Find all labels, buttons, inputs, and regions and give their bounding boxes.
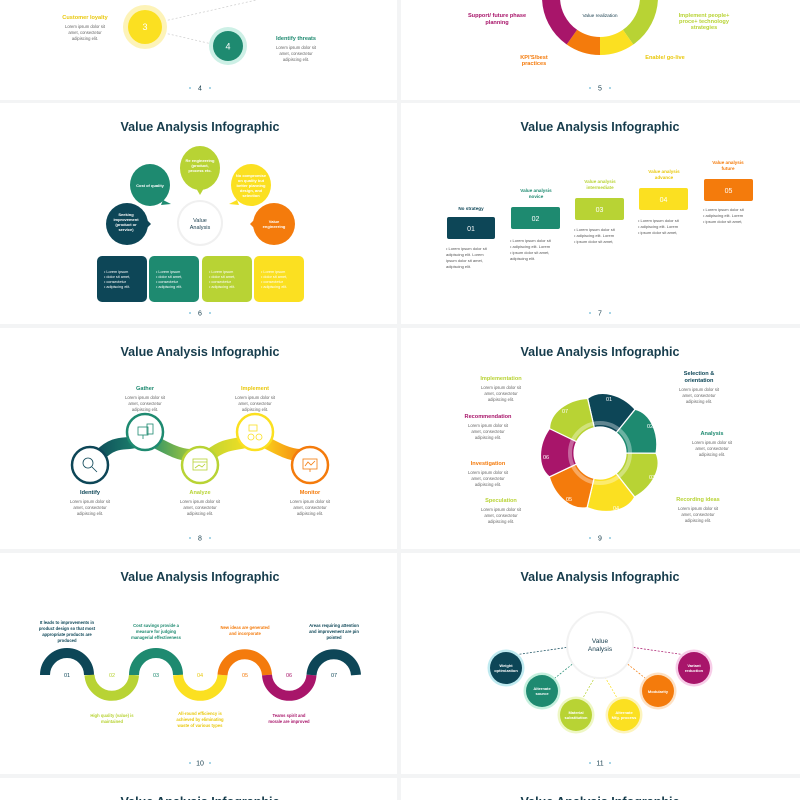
connectors (100, 442, 300, 455)
satellite circles: reduction (685, 668, 704, 673)
text: identify threats (276, 36, 317, 62)
slide 5 partial: donut: proce+ technology (679, 19, 730, 25)
bubbles (106, 146, 295, 245)
panel: slide 9 (465, 344, 733, 542)
step bullets: adipiscing elit. (446, 264, 471, 269)
page number 6: 6 (198, 310, 202, 318)
icon: circle 4 (209, 27, 247, 65)
steps: 03 (596, 207, 603, 214)
panel: slide 9: Lorem ipsum dolor sit (692, 440, 733, 445)
panel: slide 11 (488, 569, 712, 768)
panel: slide 9: amet, consectetur (471, 429, 505, 434)
step bullets: • Lorem ipsum dolor sit (574, 227, 616, 232)
step labels: future (721, 166, 735, 171)
title: Value Analysis Infographic (120, 119, 280, 134)
petal numbers: 01 (606, 397, 612, 403)
bubbles: Seeking (118, 212, 134, 217)
panel: slide 9: Analysis (700, 431, 724, 437)
icon: circle 3: 3 (142, 22, 148, 32)
text: identify threats: amet, consectetur (279, 51, 313, 56)
slide 4 partial (62, 0, 317, 92)
step bullets: • ipsum dolor sit amet, (510, 250, 549, 255)
labels right: Selection & (684, 371, 714, 377)
labels (468, 13, 526, 26)
panel: slide 8: amet, consectetur (73, 505, 107, 510)
boxes: • consectetur (261, 280, 284, 284)
boxes: • adipiscing elit. (209, 285, 235, 289)
step labels: adipiscing elit. (132, 407, 158, 412)
bubbles: service) (118, 227, 134, 232)
panel: slide 9: amet, consectetur (681, 512, 715, 517)
panel: slide 8: amet, consectetur (238, 401, 272, 406)
center circle: Analysis (190, 225, 210, 231)
panel: slide 9: Investigation (471, 461, 506, 467)
text: identify threats: Identify threats (276, 36, 316, 42)
bubbles: engineering (263, 224, 286, 229)
panel: slide 8: adipiscing elit. (242, 407, 268, 412)
page number 5 (589, 86, 611, 92)
step bullets: ipsum dolor sit amet, (446, 258, 483, 263)
bubbles: selection (242, 193, 260, 198)
bubbles: Value (269, 219, 280, 224)
captions: Teams spirit and (273, 713, 306, 718)
satellite circles: Material (568, 710, 584, 715)
steps: 02 (532, 216, 539, 223)
satellite circles: Alternate (615, 710, 633, 715)
satellite circles: Variant (687, 663, 701, 668)
boxes: • adipiscing elit. (261, 285, 287, 289)
panel: slide 10: 06 (286, 673, 292, 679)
labels right (679, 371, 720, 404)
panel: slide 9: adipiscing elit. (685, 518, 711, 523)
petal numbers: 04 (613, 506, 619, 512)
text: customer loyalty: adipiscing elit. (72, 36, 98, 41)
step bullets: • Lorem ipsum dolor sit (703, 207, 745, 212)
step labels: intermediate (586, 185, 614, 190)
labels: Support/ future phase (468, 13, 526, 19)
satellite circles: Modularity (648, 689, 669, 694)
panel: slide 8: Identify (80, 490, 101, 496)
captions: It leads to improvements in (40, 620, 95, 625)
panel: slide 8: Value Analysis Infographic (120, 344, 280, 359)
captions: maintained (101, 719, 123, 724)
slide 5 partial: donut: Enable/ go-live (645, 55, 685, 61)
step labels: Gather (136, 386, 155, 392)
petal numbers: 05 (566, 497, 572, 503)
panel: slide 8: amet, consectetur (183, 505, 217, 510)
panel: slide 10: 01 (64, 673, 70, 679)
labels left: adipiscing elit. (488, 397, 514, 402)
labels right: orientation (685, 378, 714, 384)
captions: produced (57, 638, 77, 643)
panel: slide 6 (97, 119, 304, 318)
captions: product design so that most (39, 626, 96, 631)
panel: slide 10: 03 (153, 673, 159, 679)
wave (45, 653, 356, 696)
labels: planning (485, 20, 509, 26)
panel: slide 7: 7 (598, 310, 602, 318)
captions: morale are improved (268, 719, 310, 724)
step labels: No strategy (458, 206, 484, 211)
panel: slide 10: 05 (242, 673, 248, 679)
captions: waste of various types (177, 723, 223, 728)
text: customer loyalty: amet, consectetur (68, 30, 102, 35)
panel: slide 8: adipiscing elit. (187, 511, 213, 516)
icon: circle 3 (123, 5, 167, 49)
boxes: • adipiscing elit. (156, 285, 182, 289)
satellite circles: optimization (494, 668, 518, 673)
step labels: Value analysis (648, 169, 680, 174)
text: customer loyalty (62, 15, 109, 41)
panel: slide 9: Recording ideas (676, 497, 720, 503)
text: customer loyalty: Lorem ipsum dolor sit (65, 24, 106, 29)
step bullets: • adipiscing elit. Lorem (703, 213, 744, 218)
boxes: • consectetur (209, 280, 232, 284)
step bullets: • adipiscing elit. Lorem (510, 244, 551, 249)
boxes: • Lorem ipsum (261, 270, 285, 274)
petal numbers: 02 (647, 424, 653, 430)
bubbles: Cost of quality (136, 183, 165, 188)
step labels: Value analysis (712, 160, 744, 165)
panel: slide 10: Value Analysis Infographic (120, 569, 280, 584)
satellite circles: Alternate (533, 686, 551, 691)
panel: slide 11: 11 (596, 760, 604, 768)
step bullets: • adipiscing elit. Lorem (638, 224, 679, 229)
satellite circles: source (535, 691, 549, 696)
petal numbers (543, 397, 655, 512)
boxes: • consectetur (156, 280, 179, 284)
captions: appropriate products are (42, 632, 92, 637)
satellite circles: substitution (565, 715, 588, 720)
boxes: • dolor sit amet, (156, 275, 182, 279)
panel: slide 9: amet, consectetur (484, 513, 518, 518)
panel: slide 10: 04 (197, 673, 203, 679)
panel: slide 8: Lorem ipsum dolor sit (180, 499, 221, 504)
text: identify threats: adipiscing elit. (283, 57, 309, 62)
step labels: advance (655, 175, 674, 180)
boxes: • Lorem ipsum (156, 270, 180, 274)
boxes: • dolor sit amet, (261, 275, 287, 279)
step bullets: • ipsum dolor sit amet, (574, 239, 613, 244)
panel: slide 8 (70, 344, 331, 542)
step bullets: adipiscing elit. Lorem (446, 252, 484, 257)
captions: High quality (value) is (90, 713, 134, 718)
step labels: amet, consectetur (128, 401, 162, 406)
flower chart (540, 390, 664, 516)
page number 6 (189, 310, 211, 318)
bubbles: better planning (237, 183, 266, 188)
panel: slide 9: adipiscing elit. (488, 519, 514, 524)
slide 5 partial: donut: KPI'S/best (520, 55, 548, 61)
panel: slide 9: 9 (598, 536, 602, 542)
step bullets (446, 207, 745, 269)
panel: slide 10 (39, 569, 359, 768)
labels right: amet, consectetur (682, 393, 716, 398)
panel: slide 9: Lorem ipsum dolor sit (678, 506, 719, 511)
labels left: Lorem ipsum dolor sit (481, 385, 522, 390)
step bullets: • Lorem ipsum dolor sit (510, 238, 552, 243)
steps: 05 (725, 188, 732, 195)
panel: slide 8: adipiscing elit. (77, 511, 103, 516)
page number 4 (189, 86, 211, 92)
panel: slide 9: Lorem ipsum dolor sit (468, 423, 509, 428)
step bullets: • Lorem ipsum dolor sit (446, 246, 488, 251)
satellite circles: Weight (499, 663, 513, 668)
captions: measure for judging (136, 629, 177, 634)
panel: slide 9: adipiscing elit. (475, 435, 501, 440)
center circle (566, 611, 634, 679)
panel: slide 9: Lorem ipsum dolor sit (468, 470, 509, 475)
petal numbers: 07 (562, 409, 568, 415)
number discs (57, 665, 344, 685)
icons (83, 424, 317, 472)
step bullets: • adipiscing elit. Lorem (574, 233, 615, 238)
captions: pointed (326, 635, 342, 640)
step labels: novice (529, 194, 544, 199)
bubbles: improvement (113, 217, 139, 222)
panel: slide 11: Value Analysis Infographic (520, 569, 680, 584)
step bullets: • Lorem ipsum dolor sit (638, 218, 680, 223)
boxes: • consectetur (104, 280, 127, 284)
petal numbers: 06 (543, 455, 549, 461)
center circle: Analysis (588, 646, 613, 653)
captions: Areas requiring attention (309, 623, 359, 628)
slide 5 partial: donut: Implement people+ (679, 13, 730, 19)
boxes: • dolor sit amet, (209, 275, 235, 279)
satellite circles: Mfg. process (612, 715, 637, 720)
step labels (458, 160, 744, 211)
panel: slide 10: 02 (109, 673, 115, 679)
captions (39, 620, 359, 728)
step labels: Lorem ipsum dolor sit (125, 395, 166, 400)
icon: circle 4: 4 (225, 42, 231, 52)
panel: slide 8: Lorem ipsum dolor sit (235, 395, 276, 400)
panel: slide 8: 8 (198, 536, 202, 542)
captions: All-round efficiency is (178, 711, 223, 716)
bubbles: on quality but (238, 178, 265, 183)
slide 5 partial: donut (468, 0, 730, 92)
satellite circles (488, 650, 712, 734)
center circle: Value (193, 218, 207, 224)
captions: and improvement are pin (309, 629, 359, 634)
step labels: Value analysis (584, 179, 616, 184)
panel: slide 8: Lorem ipsum dolor sit (70, 499, 111, 504)
panel: slide 7: Value Analysis Infographic (520, 119, 680, 134)
partial titles bottom (120, 794, 680, 800)
step bullets: • ipsum dolor sit amet, (638, 230, 677, 235)
center circle (177, 200, 223, 246)
panel: slide 8: Lorem ipsum dolor sit (290, 499, 331, 504)
panel: slide 9: Speculation (485, 498, 517, 504)
boxes: • Lorem ipsum (104, 270, 128, 274)
text: identify threats: Lorem ipsum dolor sit (276, 45, 317, 50)
panel: slide 9: amet, consectetur (695, 446, 729, 451)
panel: slide 10: 07 (331, 673, 337, 679)
panel: slide 8: adipiscing elit. (297, 511, 323, 516)
panel: slide 8: Analyze (189, 490, 211, 496)
boxes: • dolor sit amet, (104, 275, 130, 279)
step circles (72, 414, 328, 483)
panel: slide 8: Implement (241, 386, 269, 392)
steps (447, 179, 753, 239)
panel: slide 10: 10 (196, 760, 204, 768)
panel: slide 9: adipiscing elit. (699, 452, 725, 457)
bubbles: (product, (191, 163, 209, 168)
panel: slide 9: adipiscing elit. (475, 482, 501, 487)
labels left (480, 376, 522, 402)
steps: 01 (467, 226, 475, 233)
center circle: Value (592, 638, 608, 645)
step labels: Value analysis (520, 188, 552, 193)
text: customer loyalty: Customer loyalty (62, 15, 109, 21)
step bullets: • ipsum dolor sit amet, (703, 219, 742, 224)
bubbles: (product or (115, 222, 137, 227)
captions: and incorporate (229, 631, 261, 636)
bubbles: No compromise (236, 173, 267, 178)
panel: slide 9: Recommendation (465, 414, 512, 420)
bubbles: Re engineering (186, 158, 215, 163)
steps: 04 (660, 197, 667, 204)
panel: slide 9: Lorem ipsum dolor sit (481, 507, 522, 512)
panel: slide 7 (446, 119, 753, 318)
panel: slide 9: Value Analysis Infographic (520, 344, 680, 359)
panel: slide 8: amet, consectetur (293, 505, 327, 510)
petal numbers: 03 (649, 475, 655, 481)
step labels (125, 386, 166, 412)
panel: slide 9: amet, consectetur (471, 476, 505, 481)
bubbles: process etc. (188, 168, 212, 173)
dashed connectors (514, 647, 686, 703)
captions: managerial effectiveness (131, 635, 182, 640)
slide 5 partial: donut: Value realization (582, 13, 618, 19)
labels right: adipiscing elit. (686, 399, 712, 404)
labels right: Lorem ipsum dolor sit (679, 387, 720, 392)
slide 5 partial: donut: strategies (691, 25, 717, 31)
step bullets: adipiscing elit. (510, 256, 535, 261)
slide 5 partial: donut: practices (522, 61, 546, 67)
labels left: Implementation (480, 376, 522, 382)
boxes: • adipiscing elit. (104, 285, 130, 289)
labels left: amet, consectetur (484, 391, 518, 396)
boxes: • Lorem ipsum (209, 270, 233, 274)
page number 5: 5 (598, 86, 602, 92)
bubbles: design, and (240, 188, 263, 193)
boxes (97, 256, 304, 302)
captions: Cost savings provide a (133, 623, 180, 628)
page number 4: 4 (198, 86, 202, 92)
panel: slide 8: Monitor (300, 490, 321, 496)
captions: New ideas are generated (220, 625, 270, 630)
captions: achieved by eliminating (176, 717, 224, 722)
